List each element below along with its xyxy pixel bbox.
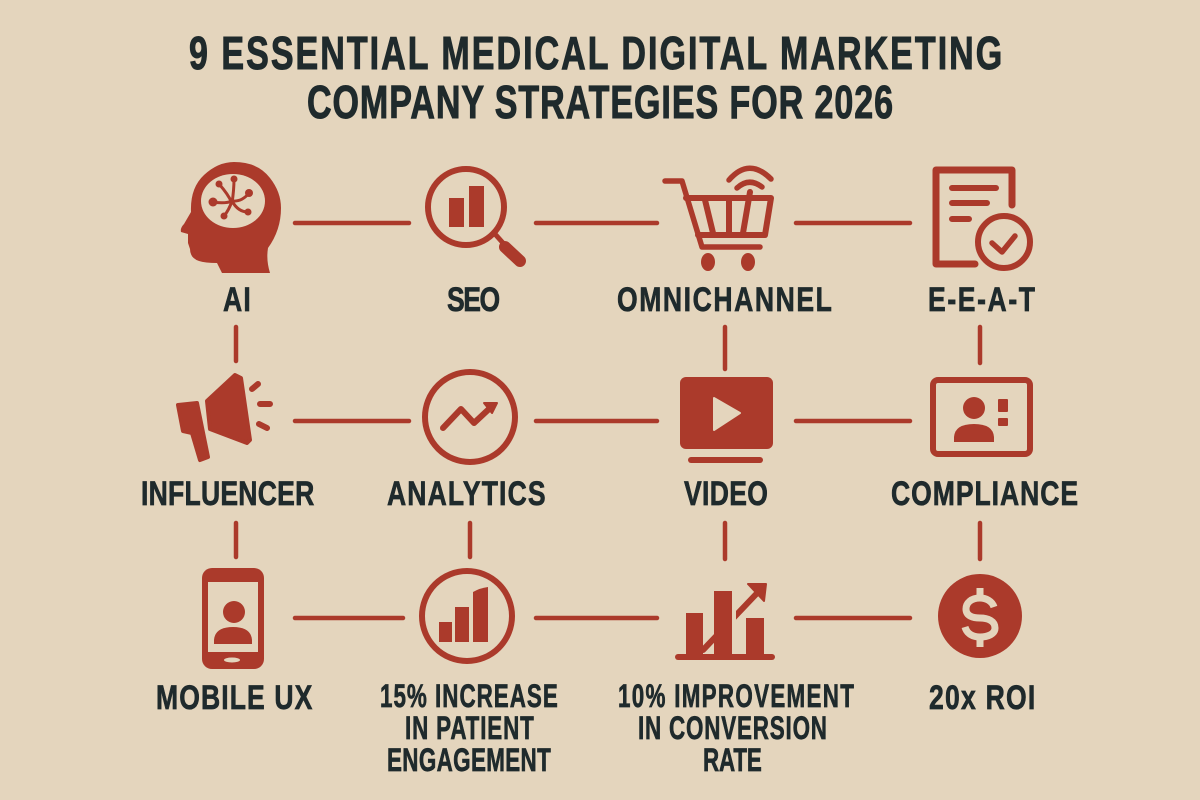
title: [189, 27, 1002, 128]
icon: omnichannel cart: [665, 168, 771, 271]
icon: engagement bar chart: [422, 571, 512, 661]
icon: video player: [680, 377, 773, 460]
label: ANALYTICS: ANALYTICS: [387, 474, 546, 513]
label: COMPLIANCE: COMPLIANCE: [891, 474, 1078, 513]
icon: AI head: [181, 162, 281, 273]
label: conversion rate stat: [618, 678, 854, 778]
icon: conversion growth chart: [678, 584, 772, 657]
icon: influencer megaphone: [178, 375, 270, 460]
label: patient engagement stat: ENGAGEMENT: [387, 742, 551, 778]
label: patient engagement stat: [380, 678, 558, 778]
label: MOBILE UX: MOBILE UX: [156, 678, 313, 717]
label: patient engagement stat: IN PATIENT: [405, 710, 534, 746]
icon: analytics circle: [425, 372, 515, 462]
label: conversion rate stat: RATE: [703, 742, 762, 778]
label: patient engagement stat: 15% INCREASE: [380, 678, 558, 714]
title: 9 ESSENTIAL MEDICAL DIGITAL MARKETING: [189, 27, 1002, 79]
label: OMNICHANNEL: OMNICHANNEL: [617, 280, 832, 319]
label: SEO: SEO: [447, 280, 500, 319]
label: INFLUENCER: INFLUENCER: [141, 474, 314, 513]
label: conversion rate stat: 10% IMPROVEMENT: [618, 678, 854, 714]
label: E-E-A-T: E-E-A-T: [928, 280, 1035, 319]
title: COMPANY STRATEGIES FOR 2026: [307, 76, 893, 128]
label: VIDEO: VIDEO: [684, 474, 768, 513]
label: 20x ROI: 20x ROI: [929, 678, 1035, 717]
icon: compliance card: [933, 380, 1030, 454]
label: conversion rate stat: IN CONVERSION: [638, 710, 827, 746]
label: AI: AI: [223, 280, 251, 319]
icon: E-E-A-T document: [936, 170, 1030, 268]
icon: dollar coin: [938, 574, 1022, 658]
icon: mobile phone: [202, 568, 264, 669]
icon: SEO magnifier: [428, 169, 520, 261]
